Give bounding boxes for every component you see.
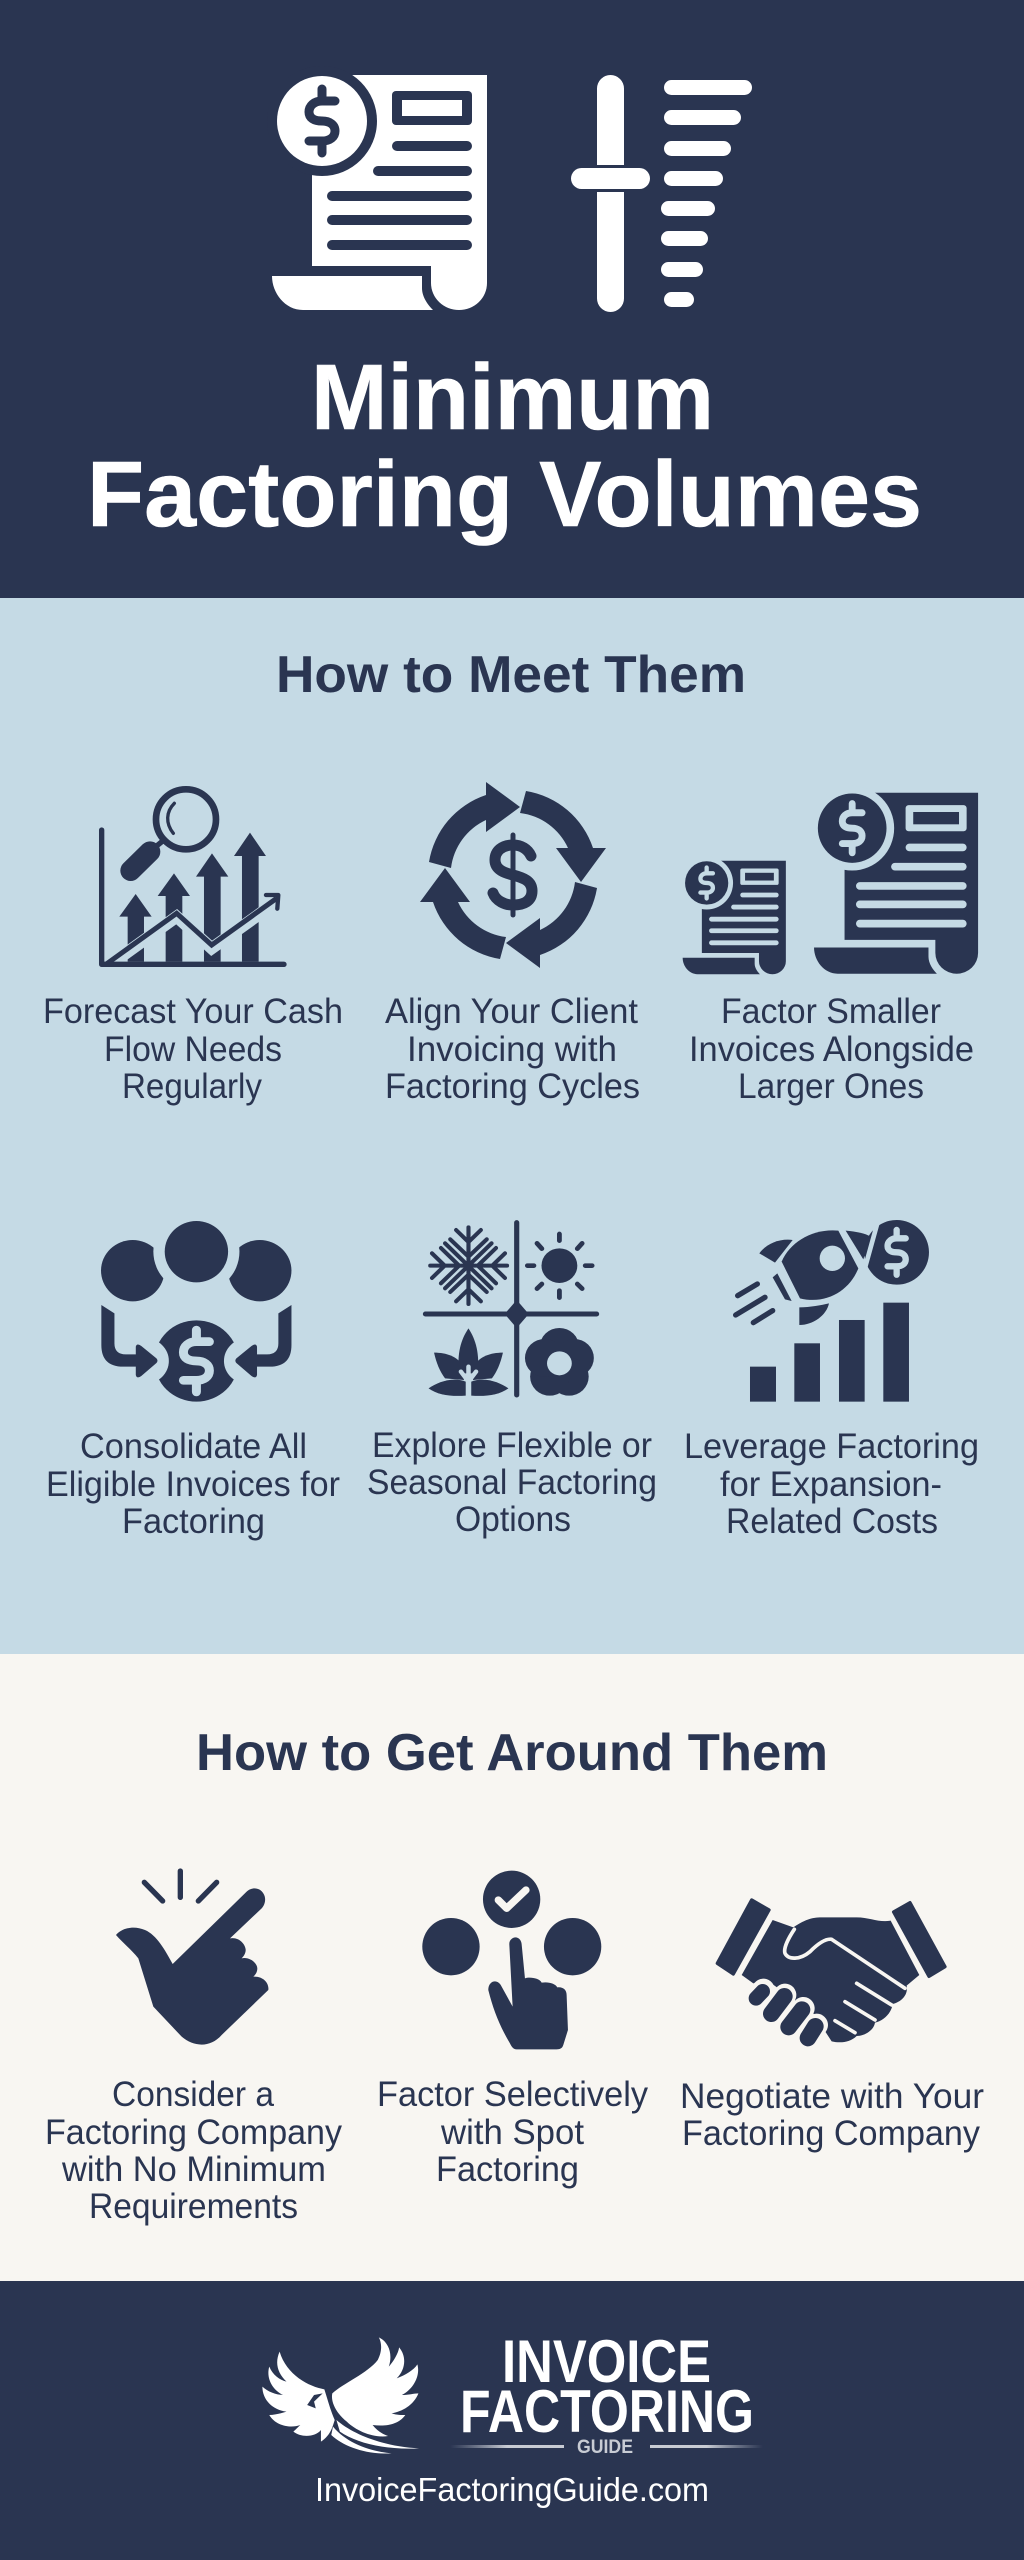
- icon: small and large invoices: [680, 786, 978, 974]
- label: [46, 1427, 340, 1541]
- label: Larger Ones: [738, 1067, 924, 1106]
- label: [45, 2075, 342, 2226]
- logo: wordmark: GUIDE: [577, 2437, 633, 2458]
- item: spot factoring: [377, 1871, 648, 2189]
- logo: wordmark: [450, 2328, 763, 2458]
- icon: rocket, coin and growth bars: [736, 1220, 929, 1402]
- website url: InvoiceFactoringGuide.com: [315, 2471, 709, 2508]
- label: Flow Needs: [104, 1030, 282, 1069]
- panel: header: [0, 0, 1024, 598]
- logo: wordmark: INVOICE: [502, 2328, 711, 2395]
- label: Requirements: [89, 2187, 298, 2226]
- label: Negotiate with Your: [680, 2077, 984, 2116]
- label: Options: [455, 1500, 571, 1539]
- label: Forecast Your Cash: [43, 992, 343, 1031]
- icon: four seasons: [425, 1223, 597, 1396]
- item: align invoicing: [385, 782, 640, 1106]
- panel: how to get around them: [0, 1654, 1024, 2281]
- item: expansion costs: [684, 1220, 979, 1541]
- label: with No Minimum: [61, 2150, 326, 2189]
- logo: wordmark: FACTORING: [460, 2378, 754, 2445]
- label: Factoring: [122, 1502, 265, 1541]
- label: Invoices Alongside: [689, 1030, 974, 1069]
- label: Factoring Company: [45, 2113, 342, 2152]
- label: Related Costs: [726, 1502, 938, 1541]
- label: [680, 2077, 984, 2153]
- heading: how to get around them: How to Get Around Them: [196, 1724, 828, 1782]
- icon: volume slider: [567, 75, 752, 312]
- panel: how to meet them: [0, 598, 1024, 1654]
- label: Eligible Invoices for: [46, 1465, 340, 1504]
- label: Regularly: [122, 1067, 262, 1106]
- label: Consider a: [112, 2075, 275, 2114]
- label: Factoring: [436, 2150, 579, 2189]
- heading: how to meet them: How to Meet Them: [276, 646, 746, 704]
- label: [684, 1427, 979, 1541]
- label: Explore Flexible or: [372, 1426, 652, 1465]
- logo: bird emblem: [262, 2337, 419, 2454]
- icon: finger snap hand: [116, 1871, 268, 2045]
- label: for Expansion-: [720, 1465, 942, 1504]
- title: Minimum: [311, 345, 714, 449]
- title: Factoring Volumes: [87, 442, 922, 546]
- panel: footer: [0, 2281, 1024, 2560]
- label: [367, 1426, 657, 1539]
- icon: cycle arrows with dollar: [420, 782, 606, 968]
- label: Factoring Company: [682, 2114, 980, 2153]
- icon: circles merging into coin: [101, 1210, 291, 1402]
- label: [43, 992, 343, 1106]
- label: [689, 992, 974, 1106]
- label: [377, 2075, 648, 2189]
- item: factor smaller invoices: [680, 786, 978, 1106]
- label: Leverage Factoring: [684, 1427, 979, 1466]
- label: Invoicing with: [407, 1030, 617, 1069]
- label: Align Your Client: [385, 992, 638, 1031]
- icon: invoice with dollar coin: [267, 66, 487, 310]
- label: Factor Smaller: [721, 992, 941, 1031]
- item: seasonal options: [367, 1223, 657, 1539]
- label: Factoring Cycles: [385, 1067, 640, 1106]
- item: negotiate: [680, 1900, 984, 2153]
- label: with Spot: [440, 2113, 584, 2152]
- label: [385, 992, 640, 1106]
- title: [87, 345, 922, 546]
- icon: handshake: [717, 1900, 945, 2042]
- icon: hand selecting option: [422, 1871, 601, 2049]
- item: consolidate invoices: [46, 1210, 340, 1541]
- label: Consolidate All: [80, 1427, 307, 1466]
- item: forecast cash flow: [43, 789, 343, 1106]
- icon: chart with magnifier: [102, 789, 284, 968]
- label: Seasonal Factoring: [367, 1463, 657, 1502]
- label: Factor Selectively: [377, 2075, 648, 2114]
- item: no minimum company: [45, 1871, 342, 2226]
